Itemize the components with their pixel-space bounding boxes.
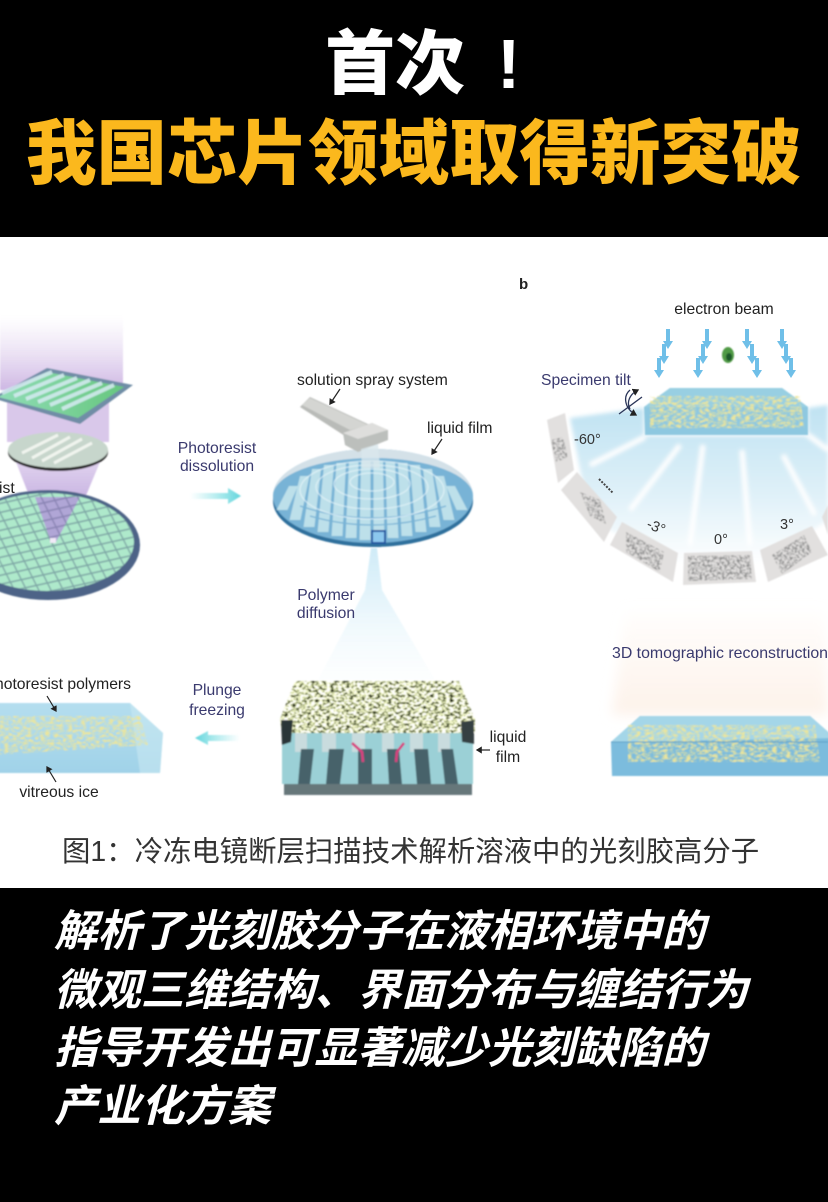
tomographic projection tiles (547, 413, 828, 585)
bottom text panel (0, 888, 828, 1202)
text line 4: 产业化方案 (54, 1083, 271, 1131)
title line 1: ! (497, 25, 520, 103)
tilt angle labels: -60° (574, 432, 601, 448)
label: photoresist dissolution: dissolution (180, 458, 254, 475)
arrow: to dissolution (190, 488, 241, 504)
text line 3: 指导开发出可显著减少光刻缺陷的 (54, 1025, 705, 1073)
specimen slab (644, 388, 808, 435)
icon: green particle (722, 347, 734, 363)
dots (599, 479, 613, 493)
photomask (0, 368, 133, 424)
label: vitreous ice (19, 767, 99, 801)
top banner (0, 0, 828, 237)
block body (282, 718, 473, 795)
label: solution spray system: solution spray system (297, 372, 448, 389)
panel: scientific figure (0, 237, 828, 888)
label: solution spray system (297, 372, 448, 404)
reconstruction glow (612, 610, 828, 715)
figure illustration (0, 276, 828, 801)
icon: tilt arrows (619, 390, 642, 415)
reconstructed slab (611, 716, 828, 776)
label: electron beam: electron beam (674, 301, 774, 318)
wafer disc (273, 449, 473, 547)
label: photoresist dissolution: Photoresist (178, 440, 257, 457)
label: plunge freezing: Plunge (193, 682, 242, 699)
arrow: plunge freezing (195, 731, 240, 745)
tilt angle labels: 3° (780, 517, 794, 533)
title line 1: 首次 (325, 25, 465, 103)
lens (8, 432, 108, 471)
title line 2: 我国芯片领域取得新突破 (26, 114, 802, 193)
polymer diffusion beam (318, 548, 435, 680)
panel label b: b (519, 276, 528, 293)
panel a: lithography exposure (0, 315, 140, 600)
light beam (0, 315, 123, 498)
label: specimen tilt: Specimen tilt (541, 372, 631, 389)
label: plunge freezing: freezing (189, 702, 245, 719)
label: 3D tomographic reconstruction: 3D tomographic reconstruction (612, 645, 828, 662)
panel: solution spray wafer (273, 397, 473, 547)
tilt angle labels: 0° (714, 532, 728, 548)
text line 1: 解析了光刻胶分子在液相环境中的 (54, 908, 705, 956)
label: liquid film right (477, 729, 526, 766)
panel: vitreous ice slab (0, 703, 163, 773)
spray nozzle (300, 397, 388, 468)
label: liquid film top (427, 420, 492, 454)
label: liquid film right: film (496, 749, 520, 766)
label: photoresist polymers (0, 676, 131, 711)
electron beam arrows (654, 329, 796, 378)
tilt angle labels: -3° (644, 517, 668, 538)
label: liquid film top: liquid film (427, 420, 492, 437)
projection fan (570, 405, 828, 565)
text line 2: 微观三维结构、界面分布与缠结行为 (54, 967, 748, 1015)
tilt angle labels (574, 432, 794, 548)
figure caption: 图1：冷冻电镜断层扫描技术解析溶液中的光刻胶高分子 (62, 836, 759, 868)
wafer with exposed dies (0, 490, 140, 600)
panel: liquid film block (280, 681, 475, 795)
polymer layer (280, 681, 475, 745)
label: polymer diffusion: Polymer (297, 587, 355, 604)
label: vitreous ice: vitreous ice (19, 784, 99, 801)
label: polymer diffusion: diffusion (297, 605, 355, 622)
label: liquid film right: liquid (490, 729, 526, 746)
